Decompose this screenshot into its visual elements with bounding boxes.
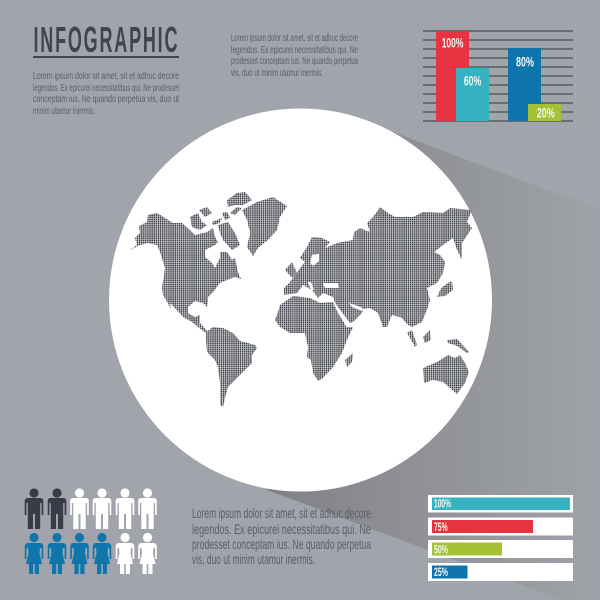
text block: top center: vis, duo ut minim utamur inermis. [231, 67, 323, 79]
bar chart: top right [423, 31, 573, 121]
text block: bottom center: Lorem ipsum dolor sit amet, sit et adhuc decore [192, 505, 371, 521]
text block: top left: minim utamur inermis. [33, 105, 95, 117]
progress bars: bottom right [428, 495, 573, 581]
bar: blue 80%: 80% [516, 54, 534, 70]
progress bar 100%: 100% [434, 498, 451, 510]
Eurasia [284, 207, 472, 327]
text block: top center: prodesset conceptam ius. Ne quando perpetua [231, 55, 358, 67]
North America [130, 213, 241, 333]
Greenland [242, 197, 287, 256]
progress bar 75%: 75% [434, 522, 448, 534]
text block: top left: conceptam ius. Ne quando perpetua vis, duo ut [33, 93, 179, 105]
dotted world map [130, 192, 472, 407]
text block: bottom center: prodesset conceptam ius. Ne quando perpetua [192, 536, 371, 552]
progress bar 50%: 50% [434, 544, 448, 556]
long shadow of circle [267, 127, 600, 600]
progress bar 50% [428, 540, 573, 558]
Africa [275, 296, 353, 381]
bar: blue 80% [508, 48, 541, 121]
bar: red 100% [436, 31, 469, 121]
people pictogram: men row [25, 488, 157, 529]
progress bar 25% [428, 563, 573, 581]
progress bar 100% [428, 495, 573, 512]
white globe circle [109, 108, 492, 492]
South America [206, 327, 257, 407]
progress bar 75% [428, 518, 573, 536]
text block: top center: legendos. Ex epicurei necessitatibus qui. Ne [231, 44, 358, 56]
text block: top left: legendos. Ex epicurei necessitatibus qui. Ne prodesset [33, 82, 179, 94]
text block: bottom center: legendos. Ex epicurei necessitatibus qui. Ne [192, 521, 371, 537]
bar: teal 60%: 60% [464, 73, 482, 89]
text block: bottom center [192, 505, 371, 567]
Arctic islands [190, 192, 252, 250]
text block: top center: Lorem ipsum dolor sit amet, sit et adhuc decore [231, 32, 358, 44]
text block: top left [33, 70, 179, 117]
Madagascar [345, 353, 353, 367]
title: INFOGRAPHIC [34, 20, 179, 61]
bar: green 20% [528, 104, 561, 121]
Australia [423, 355, 469, 394]
Indonesia and New Guinea [407, 330, 469, 353]
progress bar 25%: 25% [434, 567, 448, 579]
bar: green 20%: 20% [537, 104, 555, 120]
bar: red 100%: 100% [442, 35, 464, 51]
text block: bottom center: vis, duo ut minim utamur inermis. [192, 551, 315, 567]
text block: top left: Lorem ipsum dolor sit amet, sit et adhuc decore [33, 70, 179, 82]
UK and Japan [285, 262, 453, 297]
text block: top center [231, 32, 358, 79]
people pictogram: women row [25, 533, 157, 574]
bar: teal 60% [456, 68, 489, 121]
